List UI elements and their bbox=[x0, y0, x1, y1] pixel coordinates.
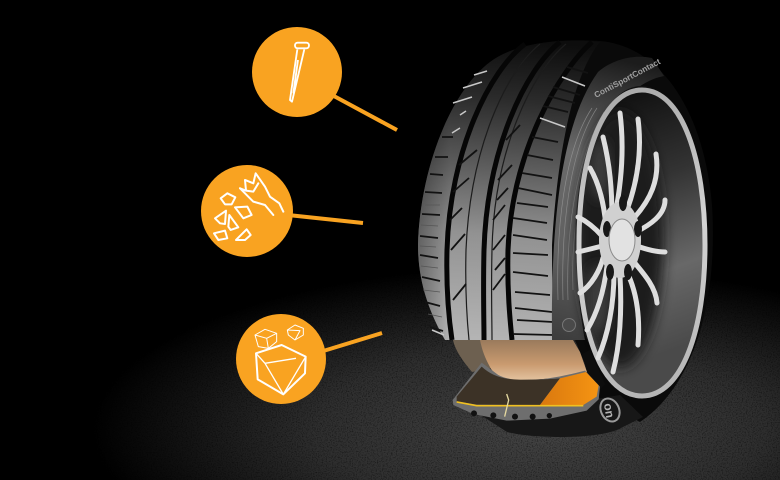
orange disc bbox=[252, 27, 342, 117]
asphalt ground bbox=[0, 260, 780, 480]
connector line bbox=[332, 95, 397, 130]
orange disc bbox=[236, 314, 326, 404]
icon: rocks bbox=[255, 325, 306, 394]
tyre cross-section bbox=[453, 363, 600, 421]
orange disc bbox=[201, 165, 293, 257]
hazard: nail bbox=[252, 27, 397, 130]
wheel openings bbox=[576, 112, 664, 368]
circumferential grooves bbox=[447, 42, 592, 340]
tread notches bbox=[471, 410, 552, 420]
inner cavity bbox=[457, 367, 560, 405]
hazard: rocks bbox=[236, 314, 382, 404]
icon: nail bbox=[290, 43, 309, 102]
nail in tyre bbox=[505, 394, 509, 417]
bolt holes bbox=[603, 195, 642, 280]
lower tread bbox=[473, 395, 643, 437]
wheel hub bbox=[609, 219, 635, 261]
connector line bbox=[320, 333, 382, 352]
sidewall logo: on bbox=[601, 402, 617, 419]
tyre body bbox=[418, 40, 713, 422]
sidewall marking bbox=[562, 318, 576, 332]
orange sealant bbox=[540, 372, 599, 405]
bright sipe highlights bbox=[432, 71, 585, 335]
translucent tyre cutaway bbox=[453, 340, 587, 380]
rim lip bbox=[579, 90, 705, 396]
sidewall lettering: ContiSportContact bbox=[592, 56, 662, 100]
spokes bbox=[578, 113, 665, 372]
connector line bbox=[288, 215, 363, 223]
hazard: broken glass bbox=[201, 165, 363, 257]
tyre illustration bbox=[418, 40, 713, 437]
shoulder sipes bbox=[420, 67, 588, 335]
sidewall logo bbox=[597, 395, 623, 425]
spoke roots bbox=[599, 202, 641, 278]
opening highlights bbox=[586, 140, 610, 335]
tread surface bbox=[418, 41, 600, 340]
sidewall band bbox=[552, 57, 664, 340]
rim bead bbox=[582, 350, 605, 390]
icon: glass shards bbox=[214, 173, 283, 240]
sealant line bbox=[457, 402, 583, 406]
minor rib lines bbox=[466, 44, 566, 340]
wheel barrel bbox=[575, 86, 707, 398]
sidewall band texture bbox=[558, 108, 610, 300]
